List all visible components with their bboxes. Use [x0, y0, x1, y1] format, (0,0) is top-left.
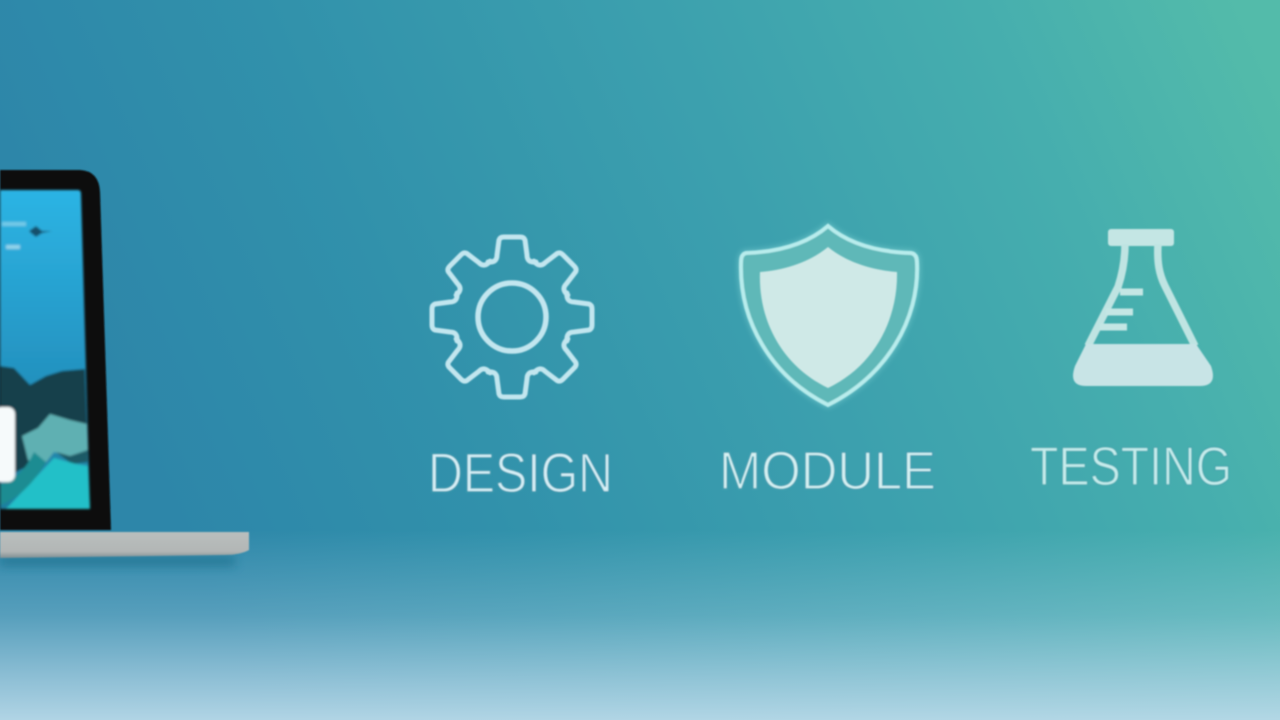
shield glow	[741, 226, 917, 405]
bottom light fade	[0, 530, 1280, 720]
screen: faint captions	[2, 222, 26, 226]
screen: dark reef	[0, 366, 87, 480]
screen: dark rock	[56, 450, 88, 464]
label: testing: TESTING	[1030, 435, 1232, 497]
shield outer	[741, 226, 917, 405]
laptop illustration	[0, 170, 249, 566]
flask liquid	[1073, 344, 1213, 386]
icon: shield	[741, 226, 917, 405]
laptop base shadow	[0, 556, 235, 566]
column: module	[719, 226, 936, 501]
column: testing	[1030, 229, 1232, 497]
laptop screen	[0, 190, 90, 509]
flask walls	[1088, 244, 1195, 346]
screen: turquoise water	[6, 458, 90, 509]
shield inner	[760, 247, 897, 388]
icon: gear	[432, 237, 592, 397]
flask lip	[1108, 229, 1174, 246]
label: module: MODULE	[719, 441, 936, 501]
laptop bezel	[0, 170, 111, 530]
icon: flask	[1073, 229, 1213, 386]
flask ticks	[1100, 292, 1143, 327]
column: design	[428, 237, 613, 504]
screen: white card	[0, 407, 15, 482]
screen: light reef	[22, 414, 88, 470]
screen: small drone	[29, 226, 52, 237]
screen: teal curve	[0, 452, 46, 505]
label: design: DESIGN	[428, 441, 613, 504]
laptop base	[0, 532, 249, 558]
